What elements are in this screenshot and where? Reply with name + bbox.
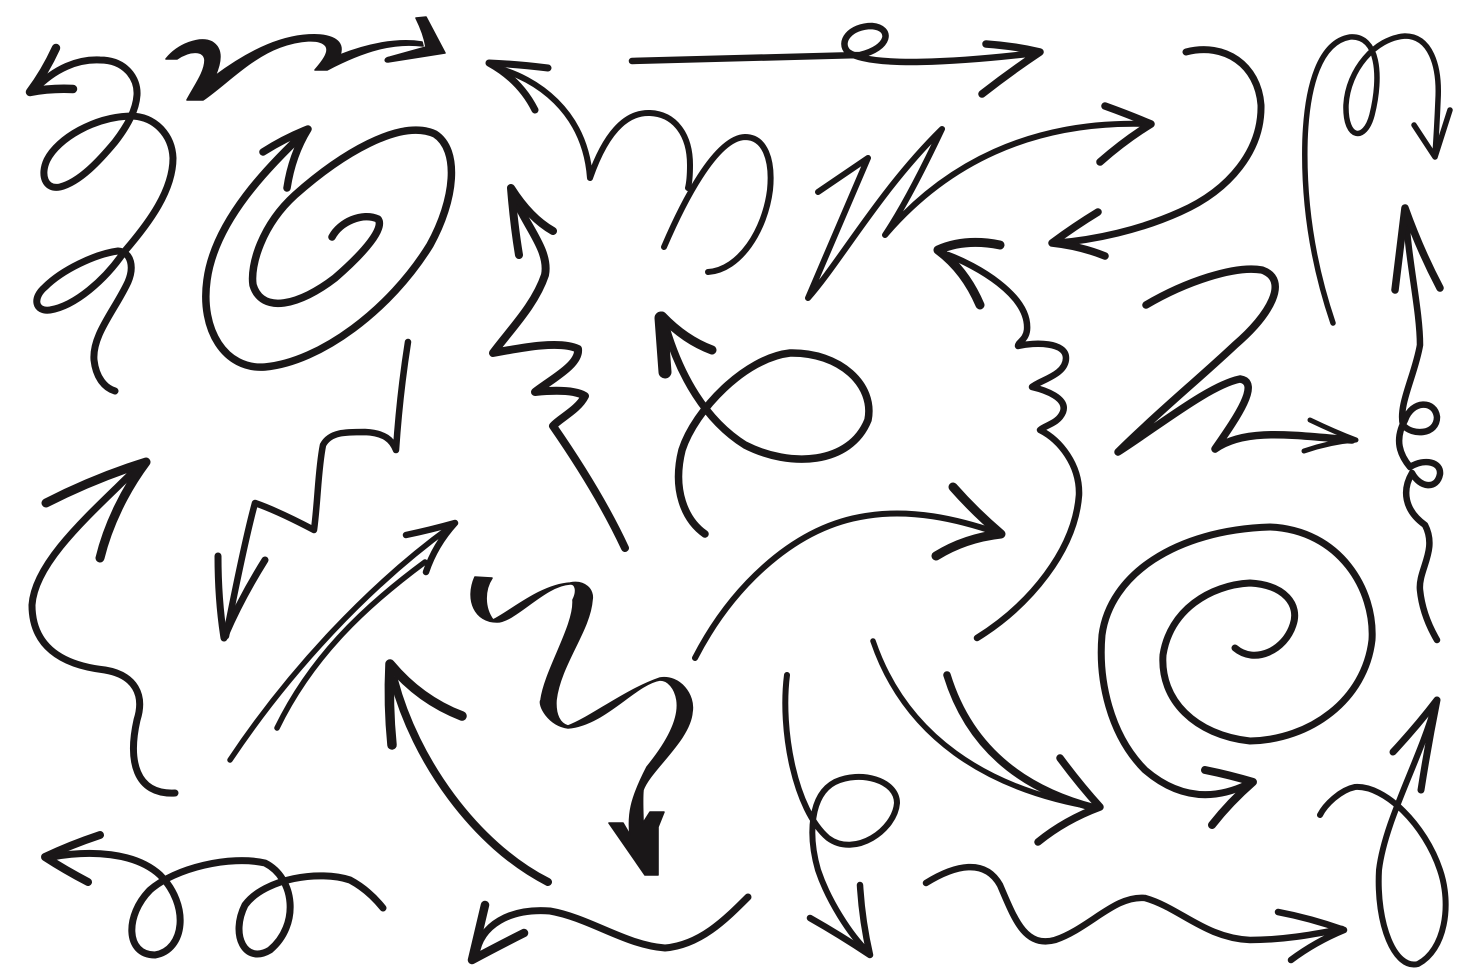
arrow: bold head with loop bbox=[661, 316, 869, 534]
arrow: wavy squiggle pointing up-left bbox=[938, 242, 1079, 638]
arrow: bottom-right long wave bbox=[926, 867, 1344, 960]
arrow: top-left ribbon bbox=[166, 17, 445, 100]
arrow: bottom wave left bbox=[472, 897, 748, 960]
arrow: bottom-right loop up bbox=[1320, 700, 1446, 965]
arrow: ribbon squiggle down bbox=[471, 577, 692, 875]
arrow: lightning down bbox=[218, 342, 408, 638]
arrow: bottom-left double loop bbox=[45, 835, 383, 955]
arrow: right vertical curly bbox=[1395, 208, 1440, 640]
arrow: top-left double loop bbox=[30, 48, 173, 391]
arrow: far-right tall loop bbox=[1305, 36, 1450, 323]
arrow: W stroke long curve bbox=[808, 106, 1151, 298]
arrow: large spiral bbox=[206, 129, 451, 367]
arrow: sweeping curve right bbox=[695, 487, 1001, 658]
arrow: arch curl pointing upper-left bbox=[489, 63, 771, 272]
arrow: curved big head up-left bbox=[389, 664, 548, 882]
arrow: top centre straight with loop bbox=[632, 26, 1040, 94]
arrow: zigzag up bbox=[493, 188, 625, 548]
arrow: Z stroke to the right bbox=[1118, 269, 1356, 452]
arrow: bottom centre loop down bbox=[785, 675, 897, 955]
arrow: right hook bbox=[1052, 50, 1261, 256]
arrow: left mid long with tail bbox=[32, 462, 175, 793]
arrow: double line diagonal bbox=[230, 523, 455, 760]
arrow: spiral bottom right bbox=[1101, 527, 1372, 825]
arrow: double line curve down-right bbox=[873, 641, 1100, 842]
